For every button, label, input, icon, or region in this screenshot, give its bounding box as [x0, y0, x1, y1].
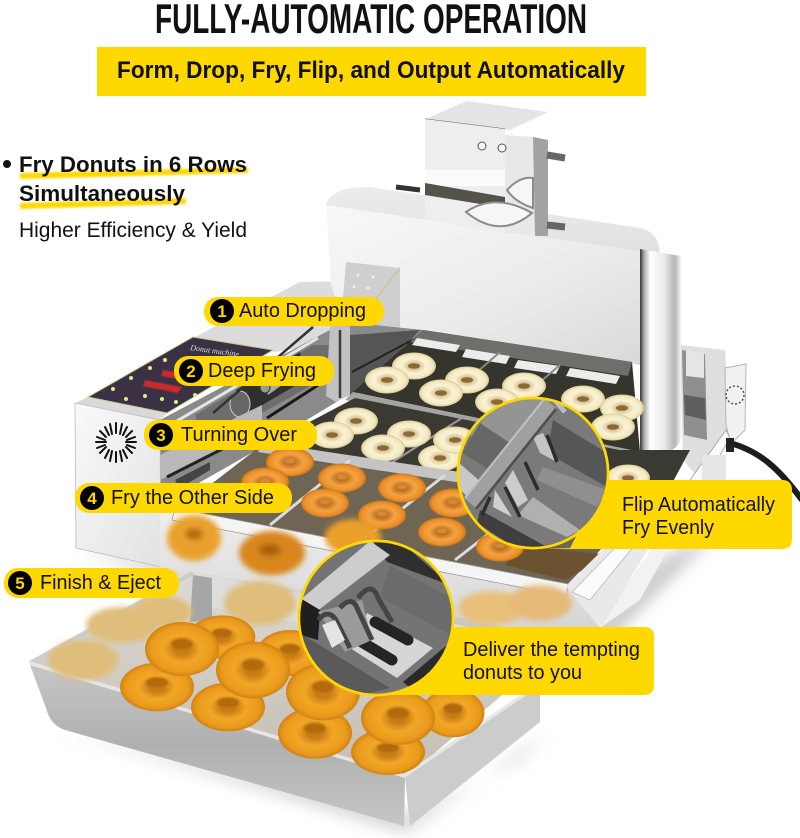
callout: deliver donuts — [380, 627, 654, 695]
falling blurred donuts — [167, 515, 572, 625]
step 2 label: Deep Frying — [208, 360, 316, 382]
step 3 label: 3 — [156, 426, 166, 445]
step 4 label — [75, 483, 292, 513]
step 4 label: 4 — [87, 489, 97, 508]
icon: fan vents — [96, 423, 136, 462]
donut behind right callout — [606, 464, 650, 492]
callout: flip automatically: Fry Evenly — [622, 517, 714, 539]
step 5 label — [4, 568, 179, 598]
feature text block: Simultaneously — [19, 181, 186, 206]
control box top — [75, 397, 167, 420]
step 5 label: Finish & Eject — [40, 572, 161, 594]
machine front — [160, 480, 700, 645]
frying tray row 3 with fried donuts — [175, 442, 645, 586]
callout: deliver donuts: donuts to you — [463, 662, 582, 684]
callout: flip automatically: Flip Automatically — [622, 494, 775, 516]
tank cylinder — [640, 249, 681, 457]
feature text block: Higher Efficiency & Yield — [19, 219, 247, 242]
step 4 label: Fry the Other Side — [111, 487, 274, 509]
control box front — [75, 403, 161, 567]
power cable — [726, 442, 800, 500]
control panel: Donut machine — [189, 343, 240, 359]
subtitle banner — [97, 47, 646, 96]
step 2 label — [174, 356, 334, 386]
magnifier: ejecting mechanism — [298, 540, 456, 696]
rear top plate — [195, 280, 420, 352]
machine shadow — [80, 530, 720, 650]
callout: flip automatically — [545, 480, 792, 549]
mechanism band — [160, 322, 423, 505]
step 1 label — [204, 297, 384, 326]
step 3 label: Turning Over — [181, 424, 297, 446]
oil strip right of cylinder — [590, 450, 690, 515]
left dropping bracket — [340, 262, 400, 334]
magnifier: flipping mechanism — [455, 395, 610, 551]
step 5 label: 5 — [15, 574, 25, 593]
step 2 label: 2 — [186, 362, 196, 381]
feature text block: Fry Donuts in 6 Rows — [19, 152, 247, 177]
subtitle banner: Form, Drop, Fry, Flip, and Output Automatically — [117, 57, 626, 84]
tank panel — [326, 205, 681, 365]
frying tray row 1 with raw donuts — [345, 330, 644, 460]
donuts in tray — [120, 615, 484, 775]
control panel — [88, 337, 273, 413]
baking tray — [30, 573, 560, 826]
callout: deliver donuts: Deliver the tempting — [463, 639, 640, 661]
frying tray row 2 with raw donuts — [262, 398, 645, 505]
right side bracket — [680, 345, 746, 490]
step 1 label: Auto Dropping — [239, 300, 366, 322]
step 3 label — [144, 420, 317, 450]
feature text block — [3, 152, 248, 242]
step 1 label: 1 — [217, 302, 227, 321]
tank lid — [326, 187, 660, 256]
tray shadow — [60, 730, 545, 832]
hopper — [396, 101, 565, 236]
